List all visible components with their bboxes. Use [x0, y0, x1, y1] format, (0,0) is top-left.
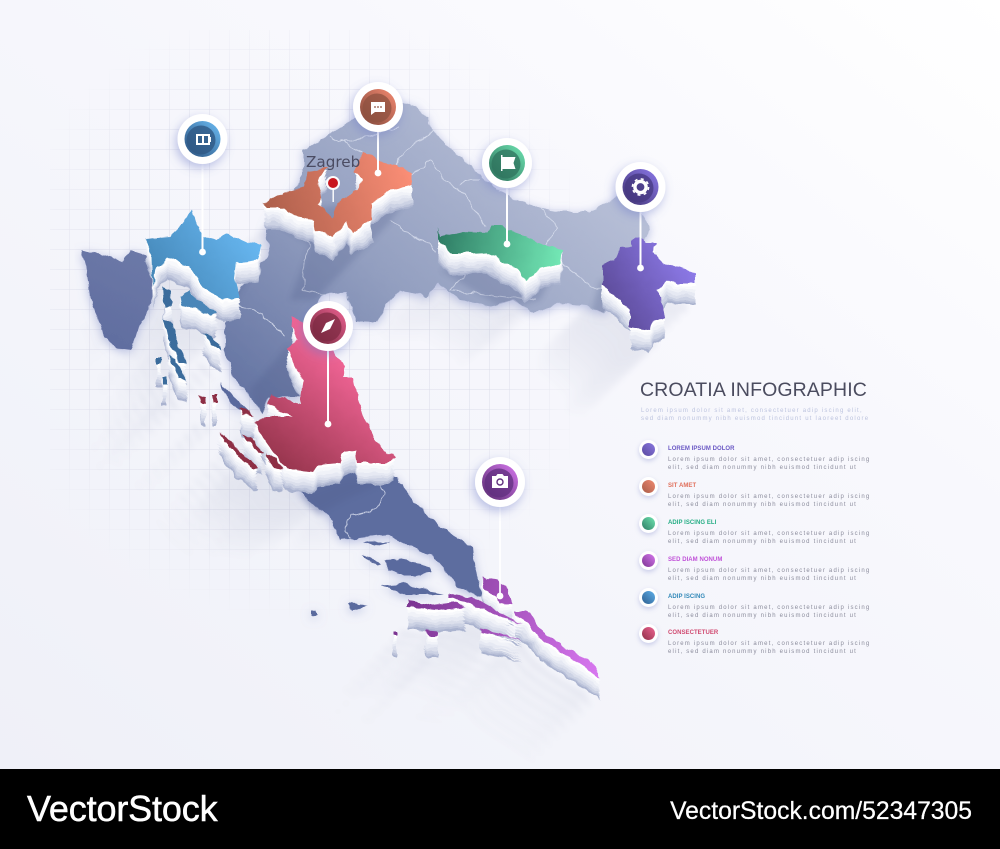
label: Zagreb: Zagreb — [306, 153, 360, 171]
legend item: blue — [637, 588, 870, 619]
county borders — [237, 127, 603, 538]
3D extrusion — [145, 155, 695, 700]
Istria peninsula — [82, 250, 153, 350]
intro text: sed diam nonummy nibh euismod tincidunt ut laoreet dolore — [641, 416, 869, 422]
icon: camera — [492, 474, 508, 488]
intro text: Lorem ipsum dolor sit amet, consectetuer adip iscing elit, — [641, 408, 863, 414]
pin: violet gear — [616, 162, 666, 271]
legend item: green: elit, sed diam nonummy nibh euismod tincidunt ut — [668, 539, 857, 545]
pin: pink compass — [303, 301, 353, 427]
legend item: blue: Lorem ipsum dolor sit amet, consectetuer adip iscing — [668, 605, 870, 611]
region: blue — [145, 210, 261, 384]
title: CROATIA INFOGRAPHIC — [640, 379, 867, 401]
legend item: green — [637, 514, 870, 545]
icon: chat bubble — [371, 102, 385, 115]
legend item: orange: Lorem ipsum dolor sit amet, consectetuer adip iscing — [668, 494, 870, 500]
region: pink — [200, 317, 395, 472]
region: green — [438, 225, 562, 280]
icon: Zagreb location pin — [326, 176, 340, 202]
long shadows on the ground — [81, 182, 687, 764]
pin: green flag — [482, 138, 532, 247]
pin: orange chat — [353, 82, 403, 176]
legend item: purple: Lorem ipsum dolor sit amet, consectetuer adip iscing — [668, 457, 870, 463]
legend item: green: Lorem ipsum dolor sit amet, consectetuer adip iscing — [668, 531, 870, 537]
intro text — [641, 408, 869, 422]
region: magenta — [392, 577, 600, 678]
legend item: pink — [637, 624, 870, 655]
highlighted regions with 3D extrusion — [145, 152, 695, 700]
legend item: purple — [637, 440, 870, 471]
legend item: magenta: SED DIAM NONUM — [668, 557, 722, 563]
legend item: green: ADIP ISCING ELI — [668, 520, 716, 526]
legend item: blue: ADIP ISCING — [668, 594, 705, 600]
legend item: pink: CONSECTETUER — [668, 630, 718, 636]
legend item: pink: elit, sed diam nonummy nibh euismod tincidunt ut — [668, 649, 857, 655]
icon: flag — [501, 155, 516, 171]
region: violet — [602, 238, 695, 330]
shadows falling across the map — [238, 204, 605, 412]
footer logo text: VectorStock — [27, 788, 217, 829]
grey mainland — [220, 100, 650, 615]
pin: magenta camera — [475, 457, 525, 599]
map: Croatia base regions — [81, 100, 687, 764]
legend item: purple: elit, sed diam nonummy nibh euismod tincidunt ut — [668, 465, 857, 471]
legend item: magenta: Lorem ipsum dolor sit amet, consectetuer adip iscing — [668, 568, 870, 574]
footer image id: VectorStock.com/52347305 — [670, 798, 972, 825]
legend item: orange: elit, sed diam nonummy nibh euismod tincidunt ut — [668, 502, 857, 508]
icon: gear — [635, 181, 646, 193]
pin: blue battery — [178, 114, 228, 255]
legend item: magenta — [637, 551, 870, 582]
icon: compass needle — [321, 319, 335, 333]
shadow of pink region on the southern map — [300, 478, 395, 515]
legend item: purple: LOREM IPSUM DOLOR — [668, 446, 735, 452]
legend item: orange: SIT AMET — [668, 483, 696, 489]
legend item: blue: elit, sed diam nonummy nibh euismod tincidunt ut — [668, 613, 857, 619]
legend item: orange — [637, 477, 870, 508]
footer bar — [0, 769, 1000, 849]
background grid — [50, 30, 570, 630]
icon: battery — [196, 134, 211, 145]
region: orange with Zagreb — [263, 152, 413, 238]
legend item: magenta: elit, sed diam nonummy nibh euismod tincidunt ut — [668, 576, 857, 582]
legend item: pink: Lorem ipsum dolor sit amet, consectetuer adip iscing — [668, 641, 870, 647]
